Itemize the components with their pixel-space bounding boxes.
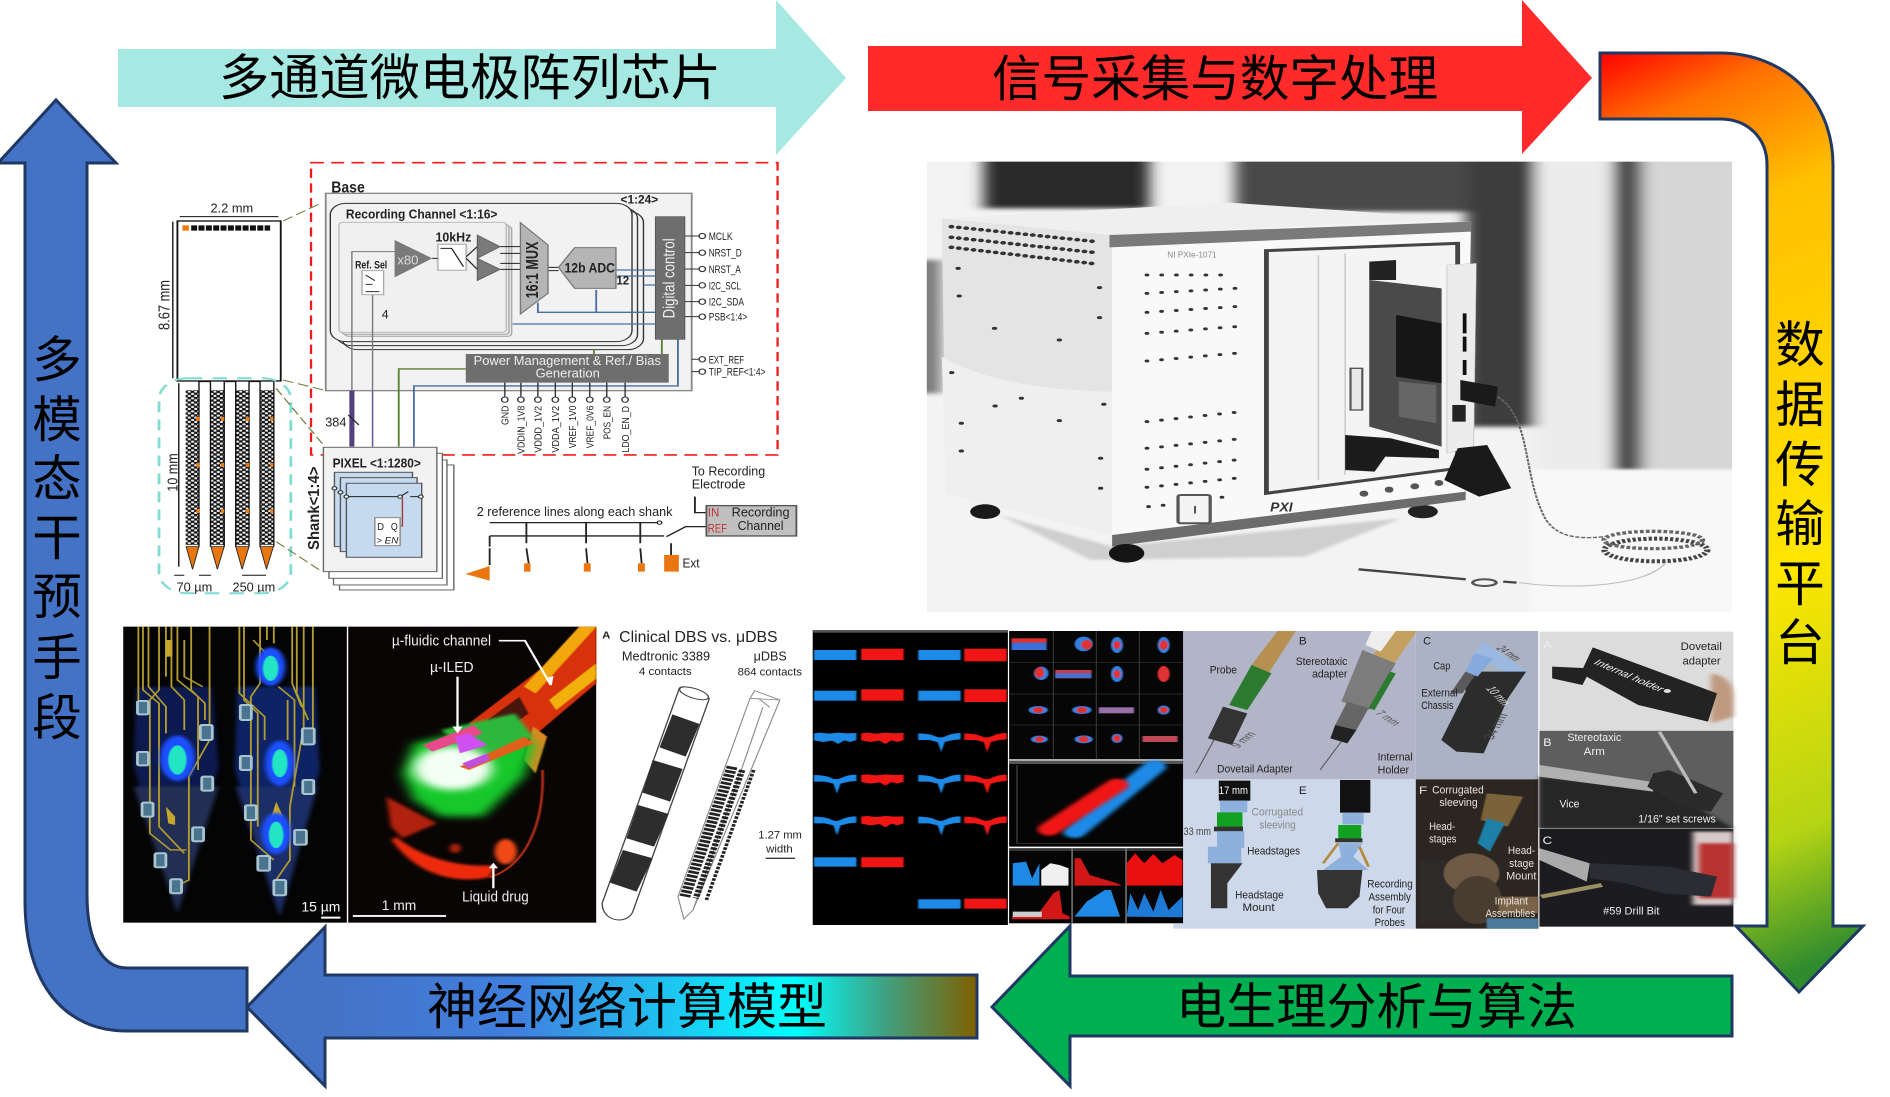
pixel stack: > EN bbox=[376, 536, 399, 546]
D and E headstage assemblies: Headstages bbox=[1247, 844, 1300, 857]
cluster view bbox=[1009, 631, 1183, 759]
heading: data transmission platform: 输 bbox=[1775, 497, 1825, 552]
reference line circuit: IN bbox=[708, 507, 719, 520]
base block: Recording Channel <1:16> bbox=[346, 208, 497, 222]
D and E headstage assemblies bbox=[1184, 780, 1413, 929]
F mouse implant photo: F bbox=[1419, 784, 1427, 797]
C drill photo bbox=[1539, 829, 1733, 927]
heading: data transmission platform: 平 bbox=[1775, 557, 1825, 612]
red dashed base outline bbox=[311, 163, 778, 455]
heading: data transmission platform: 数 bbox=[1775, 318, 1825, 373]
four shanks: 70 µm bbox=[176, 581, 212, 595]
reference line circuit: Channel bbox=[738, 519, 784, 533]
D and E headstage assemblies: Corrugated bbox=[1252, 805, 1303, 818]
C external chassis bbox=[1421, 634, 1529, 753]
C external chassis: External bbox=[1421, 686, 1458, 699]
A and B assemblies: Internal bbox=[1378, 750, 1413, 763]
base block: 10kHz bbox=[435, 231, 472, 245]
D and E headstage assemblies: Headstage bbox=[1235, 888, 1284, 901]
panel: neural probe and droplet fluorescence photos bbox=[123, 627, 802, 923]
D and E headstage assemblies: 17 mm bbox=[1219, 784, 1248, 797]
B stereotaxic arm photo: 1/16" set screws bbox=[1638, 812, 1716, 825]
output pins: VDDD_1V2 bbox=[532, 406, 544, 453]
A and B assemblies: Holder bbox=[1378, 763, 1409, 776]
output pins: LDO_EN_D bbox=[620, 406, 631, 453]
pixel stack bbox=[305, 447, 454, 590]
heading: multimodal intervention: 模 bbox=[32, 393, 82, 448]
clinical DBS vs microDBS leads: 1.27 mm bbox=[758, 829, 802, 841]
heading: multimodal intervention: 干 bbox=[32, 511, 82, 566]
clinical DBS vs microDBS leads: width bbox=[765, 842, 793, 855]
F mouse implant photo: stages bbox=[1429, 832, 1456, 845]
instrument chassis: I bbox=[1192, 504, 1198, 516]
fluorescence probes photo bbox=[123, 627, 347, 923]
instrument chassis bbox=[942, 203, 1511, 563]
panel: probe and chip schematic bbox=[156, 163, 796, 595]
heading: data transmission platform: 传 bbox=[1775, 438, 1825, 493]
reference line circuit: Ext bbox=[683, 556, 700, 571]
spike waveform traces bbox=[813, 630, 1008, 925]
pixel stack: D bbox=[377, 521, 384, 532]
amplitude scatter plot bbox=[1009, 761, 1183, 847]
F mouse implant photo: Implant bbox=[1495, 894, 1528, 907]
F mouse implant photo: Corrugated bbox=[1432, 783, 1484, 796]
base block: <1:24> bbox=[621, 193, 658, 207]
droplet photo: Liquid drug bbox=[462, 888, 529, 905]
base block: 12b ADC bbox=[565, 260, 615, 276]
clinical DBS vs microDBS leads: A bbox=[602, 630, 611, 641]
arrow: data transmission platform bbox=[1600, 53, 1863, 992]
pixel stack: PIXEL <1:1280> bbox=[333, 457, 421, 471]
reference line circuit: Electrode bbox=[692, 478, 745, 492]
heading: data transmission platform: 台 bbox=[1775, 616, 1825, 671]
A and B assemblies: Dovetail Adapter bbox=[1217, 762, 1293, 775]
C external chassis: 34 mm bbox=[1481, 713, 1511, 741]
arrow: neural network computational model bbox=[247, 927, 977, 1086]
clinical DBS vs microDBS leads: μDBS bbox=[754, 650, 787, 664]
A and B assemblies: Stereotaxic bbox=[1296, 655, 1347, 668]
clinical DBS vs microDBS leads: Medtronic 3389 bbox=[622, 650, 710, 664]
F mouse implant photo: Head- bbox=[1508, 844, 1535, 857]
arrow: multichannel microelectrode array chip bbox=[118, 0, 846, 155]
C external chassis: 10 mm bbox=[1482, 685, 1514, 707]
instrument chassis: NI PXIe-1071 bbox=[1167, 251, 1217, 260]
heading: multimodal intervention: 手 bbox=[32, 631, 82, 686]
output pins bbox=[499, 230, 766, 454]
heading: data transmission platform: 据 bbox=[1775, 378, 1825, 433]
output pins: GND bbox=[499, 405, 511, 425]
base block: Power Management & Ref./ Bias bbox=[474, 354, 661, 368]
droplet photo: µ-ILED bbox=[430, 659, 474, 675]
arrow: electrophysiology analysis and algorithms bbox=[992, 926, 1732, 1086]
arrow: multimodal intervention bbox=[0, 100, 247, 1031]
A holder photo bbox=[1539, 632, 1733, 730]
D and E headstage assemblies: for Four bbox=[1373, 903, 1405, 916]
four shanks: 250 µm bbox=[233, 581, 275, 595]
D and E headstage assemblies: sleeving bbox=[1259, 818, 1296, 831]
reference line circuit: To Recording bbox=[692, 465, 765, 479]
panel: probe holder photos bbox=[1539, 632, 1733, 927]
C external chassis: 24 mm bbox=[1493, 644, 1524, 663]
A and B assemblies: Probe bbox=[1210, 663, 1237, 676]
instrument chassis: PXI bbox=[1270, 500, 1293, 515]
B stereotaxic arm photo: B bbox=[1543, 736, 1552, 749]
heading: signal acquisition and digital processing: 信号采集与数字处理 bbox=[992, 52, 1438, 107]
output pins: VDDIN_1V8 bbox=[515, 406, 527, 454]
F mouse implant photo: Head- bbox=[1429, 820, 1455, 833]
base block: Generation bbox=[536, 367, 600, 381]
output pins: NRST_A bbox=[709, 263, 741, 275]
clinical DBS vs microDBS leads: 4 contacts bbox=[639, 665, 692, 677]
B stereotaxic arm photo: Arm bbox=[1584, 745, 1605, 758]
base block: Ref. Sel bbox=[355, 258, 387, 271]
arrow: signal acquisition and digital processing bbox=[868, 0, 1592, 154]
F mouse implant photo: sleeving bbox=[1439, 796, 1478, 809]
base block: 16:1 MUX bbox=[523, 241, 542, 298]
droplet photo bbox=[348, 627, 596, 923]
output pins: I2C_SCL bbox=[709, 279, 741, 292]
pixel stack: Shank<1:4> bbox=[305, 467, 322, 550]
output pins: TIP_REF<1:4> bbox=[709, 366, 766, 378]
384 bus label: 384 bbox=[325, 415, 346, 430]
C drill photo: #59 Drill Bit bbox=[1603, 904, 1660, 917]
D and E headstage assemblies: Mount bbox=[1242, 901, 1275, 914]
clinical DBS vs microDBS leads bbox=[602, 628, 802, 920]
fluorescence probes photo: 15 µm bbox=[301, 899, 340, 915]
reference line circuit: REF bbox=[708, 523, 727, 536]
C external chassis: C bbox=[1423, 634, 1431, 647]
A holder photo: A bbox=[1543, 638, 1553, 651]
heading: multimodal intervention: 多 bbox=[32, 333, 82, 388]
four shanks: 10 mm bbox=[164, 453, 181, 492]
reference line circuit bbox=[465, 465, 796, 581]
A holder photo: adapter bbox=[1682, 654, 1721, 667]
A holder photo: Internal holder bbox=[1590, 658, 1667, 694]
output pins: POS_EN bbox=[601, 406, 613, 439]
A and B assemblies: B bbox=[1299, 634, 1307, 647]
output pins: VREF_1V0 bbox=[567, 406, 578, 448]
pixel stack: Q bbox=[391, 521, 398, 532]
B stereotaxic arm photo: Stereotaxic bbox=[1567, 731, 1621, 744]
output pins: PSB<1:4> bbox=[709, 311, 747, 323]
F mouse implant photo bbox=[1419, 783, 1538, 929]
A holder photo: Dovetail bbox=[1681, 640, 1722, 653]
probe base outline bbox=[156, 202, 281, 381]
heading: multimodal intervention: 预 bbox=[32, 570, 82, 625]
A and B assemblies: adapter bbox=[1312, 667, 1348, 680]
teal dashed shank outline bbox=[159, 378, 291, 593]
heading: neural network computational model: 神经网络计算模型 bbox=[427, 980, 827, 1035]
droplet photo: µ-fluidic channel bbox=[392, 632, 491, 649]
B stereotaxic arm photo: Vice bbox=[1559, 797, 1579, 810]
A and B assemblies: 7 mm bbox=[1372, 709, 1404, 727]
photo background bbox=[914, 150, 1750, 612]
output pins: EXT_REF bbox=[709, 353, 744, 366]
output pins: VREF_0V6 bbox=[584, 406, 596, 448]
four shanks bbox=[164, 381, 281, 595]
B stereotaxic arm photo bbox=[1539, 731, 1733, 828]
probe base outline: 8.67 mm bbox=[156, 280, 173, 330]
panel: CAD implant assembly bbox=[1173, 631, 1538, 929]
heading: multichannel microelectrode array chip: 多通道微电极阵列芯片 bbox=[219, 51, 721, 106]
panel: spike sorting software screens bbox=[813, 630, 1183, 925]
C external chassis: Chassis bbox=[1421, 699, 1453, 712]
panel: PXI instrument photo bbox=[914, 150, 1750, 612]
heading: multimodal intervention: 态 bbox=[32, 452, 82, 507]
output pins: I2C_SDA bbox=[709, 296, 744, 308]
base block: 12 bbox=[616, 274, 629, 288]
droplet photo: 1 mm bbox=[382, 898, 416, 913]
panel: CAD implant assembly: Assembly bbox=[1369, 890, 1411, 903]
D and E headstage assemblies: 33 mm bbox=[1184, 825, 1211, 838]
histograms bbox=[1009, 848, 1183, 923]
probe base outline: 2.2 mm bbox=[210, 202, 253, 216]
D and E headstage assemblies: Probes bbox=[1375, 916, 1405, 929]
base block: 4 bbox=[382, 308, 389, 322]
D and E headstage assemblies: E bbox=[1299, 784, 1307, 797]
cable and coil bbox=[1359, 397, 1707, 586]
base block: Digital control bbox=[661, 238, 679, 318]
output pins: VDDA_1V2 bbox=[550, 406, 561, 453]
CAD panel background bbox=[1173, 631, 1538, 929]
F mouse implant photo: stage bbox=[1509, 857, 1534, 870]
output pins: NRST_D bbox=[709, 247, 742, 259]
base block: x80 bbox=[397, 254, 418, 268]
vent and screw holes bbox=[951, 227, 1235, 507]
heading: electrophysiology analysis and algorithms: 电生理分析与算法 bbox=[1176, 980, 1577, 1035]
C drill photo: C bbox=[1542, 834, 1552, 847]
heading: multimodal intervention: 段 bbox=[32, 691, 82, 746]
output pins: MCLK bbox=[709, 230, 733, 242]
base block bbox=[326, 178, 692, 447]
F mouse implant photo: Assemblies bbox=[1485, 907, 1535, 920]
A and B assemblies: 9 mm bbox=[1228, 730, 1259, 749]
F mouse implant photo: Mount bbox=[1506, 869, 1537, 882]
reference line circuit: Recording bbox=[732, 506, 790, 520]
C external chassis: Cap bbox=[1433, 659, 1450, 672]
clinical DBS vs microDBS leads: Clinical DBS vs. μDBS bbox=[619, 628, 778, 645]
base block: Base bbox=[331, 178, 365, 196]
panel: CAD implant assembly: Recording bbox=[1367, 877, 1413, 890]
reference line circuit: 2 reference lines along each shank bbox=[477, 505, 673, 519]
clinical DBS vs microDBS leads: 864 contacts bbox=[738, 666, 802, 678]
A and B assemblies bbox=[1196, 631, 1417, 776]
